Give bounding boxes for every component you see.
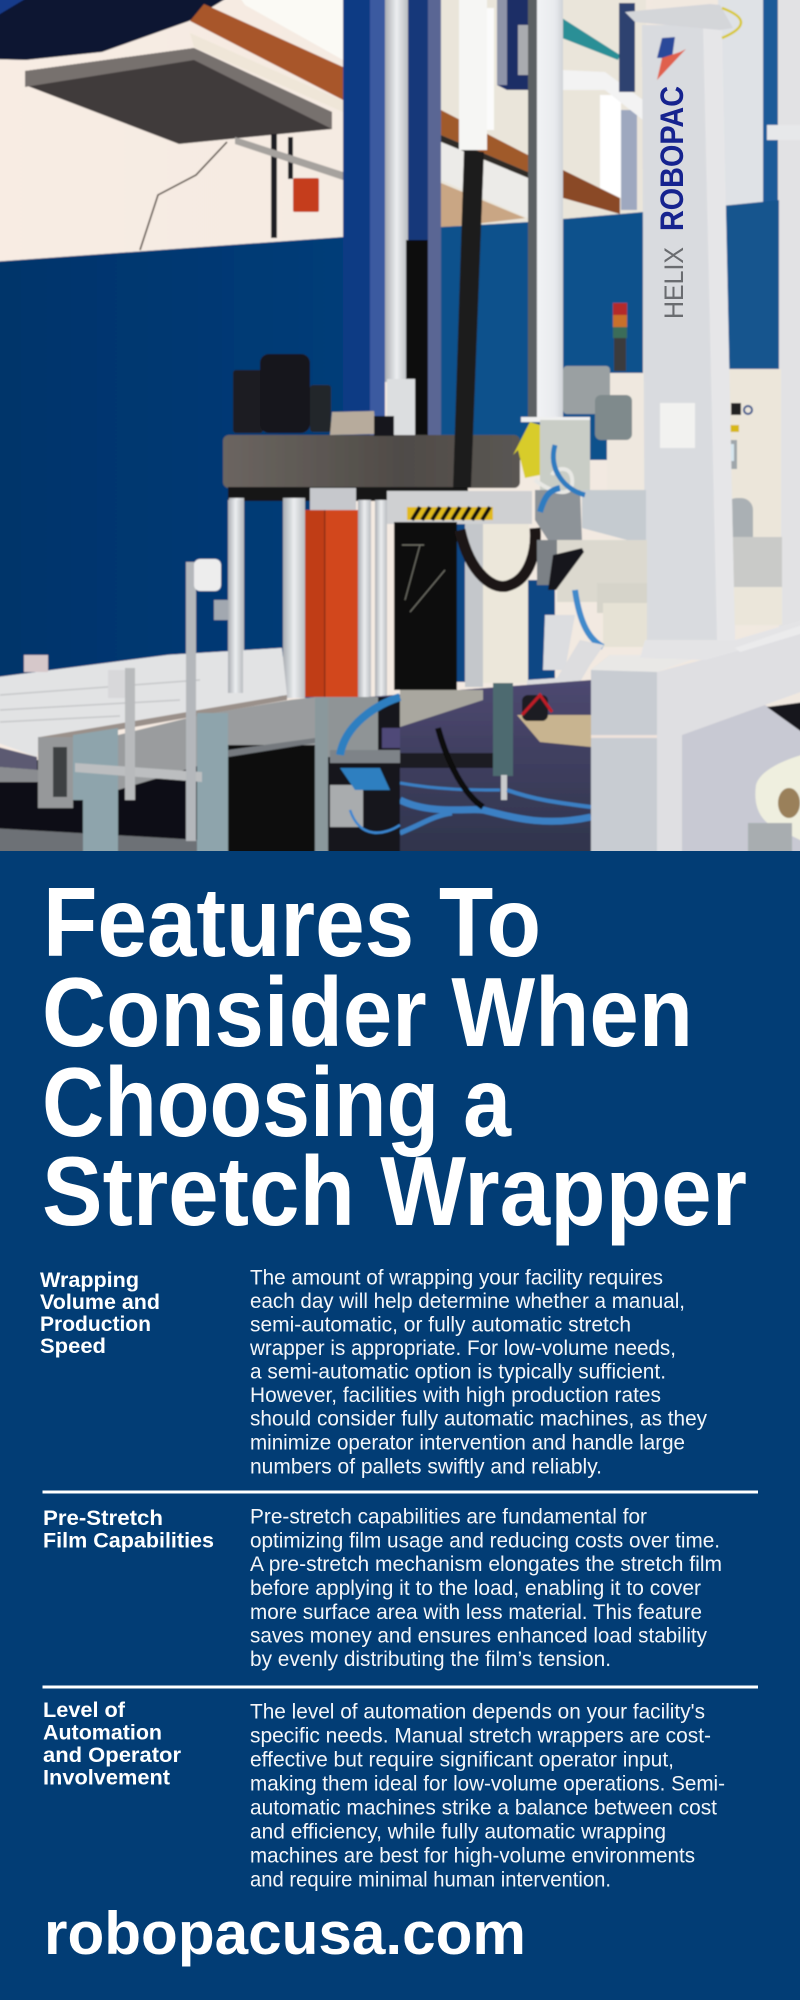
hoses on floor — [400, 728, 591, 833]
support arm — [527, 640, 604, 687]
carriage underside — [228, 487, 468, 501]
signal tower — [613, 303, 627, 371]
silver pipe — [528, 0, 563, 420]
logo text: HELIX: HELIX — [659, 247, 689, 319]
logo text: ROBOPAC: ROBOPAC — [654, 86, 690, 231]
gray motor unit — [521, 366, 632, 492]
title: Choosing a — [42, 1047, 512, 1157]
orange film rollers — [305, 510, 358, 697]
text block: wrapping volume: each day will help determine whether a manual, — [250, 1289, 685, 1313]
text block: level of automation: The level of automation depends on your facility's — [250, 1700, 705, 1724]
debris under machine — [517, 695, 591, 747]
gray ring floor — [400, 690, 483, 727]
black motor — [233, 354, 394, 436]
heading: level of automation and operator involvement: Automation — [43, 1720, 162, 1744]
main pillar with logo — [625, 4, 741, 640]
conveyor legs — [73, 697, 328, 870]
text block: level of automation: effective but require significant operator input, — [250, 1748, 674, 1772]
sensor stand — [108, 500, 243, 841]
website url: robopacusa.com — [44, 1900, 526, 1967]
gray gearbox — [535, 490, 646, 585]
text block: level of automation — [250, 1700, 725, 1892]
conveyor and lower frame dark — [0, 646, 316, 851]
heading: pre-stretch film capabilities: Film Capabilities — [43, 1528, 214, 1552]
title: Stretch Wrapper — [42, 1136, 747, 1246]
heading: level of automation and operator involvement: Level of — [43, 1698, 126, 1722]
heading: wrapping volume and production speed: Speed — [40, 1334, 106, 1358]
cream machinery block — [557, 540, 647, 647]
hazard beam — [387, 491, 532, 524]
heading: wrapping volume and production speed: Production — [40, 1312, 151, 1336]
text block: wrapping volume: should consider fully automatic machines, as they — [250, 1406, 707, 1430]
text block: wrapping volume: semi-automatic, or fully automatic stretch — [250, 1312, 631, 1336]
cream cylinder and blue gap — [457, 522, 555, 687]
rotating ring — [223, 435, 520, 488]
text block: level of automation: automatic machines strike a balance between cost — [250, 1796, 717, 1820]
text block: level of automation: machines are best for high-volume environments — [250, 1844, 695, 1868]
text block: wrapping volume: minimize operator intervention and handle large — [250, 1430, 685, 1454]
heading: level of automation and operator involvement: and Operator — [43, 1743, 182, 1767]
photo: Robopac Helix stretch wrapper in a factory — [0, 0, 800, 880]
heading: wrapping volume and production speed: Volume and — [40, 1290, 160, 1314]
black panel — [394, 522, 457, 690]
yellow and blue cables — [513, 422, 603, 670]
floor — [370, 679, 592, 851]
column: navy uprights — [343, 0, 441, 440]
heading: wrapping volume and production speed: Wrapping — [40, 1268, 139, 1292]
text block: pre-stretch: optimizing film usage and reducing costs over time. — [250, 1528, 720, 1552]
machine base — [590, 627, 800, 851]
text block: wrapping volume: The amount of wrapping your facility requires — [250, 1266, 663, 1290]
floor bar and post — [400, 683, 513, 800]
text block: level of automation: and efficiency, while fully automatic wrapping — [250, 1820, 666, 1844]
silver legs — [229, 488, 387, 698]
text block: pre-stretch: more surface area with less material. This feature — [250, 1600, 702, 1624]
text block: wrapping volume: wrapper is appropriate. For low-volume needs, — [249, 1336, 676, 1360]
text block: level of automation: specific needs. Manual stretch wrappers are cost- — [250, 1724, 711, 1748]
text block: pre-stretch: Pre-stretch capabilities are fundamental for — [250, 1504, 647, 1528]
text block: wrapping volume — [249, 1266, 707, 1478]
text block: pre-stretch: A pre-stretch mechanism elongates the stretch film — [250, 1552, 722, 1576]
text block: level of automation: making them ideal for low-volume operations. Semi- — [250, 1772, 725, 1796]
text block: wrapping volume: a semi-automatic option is typically sufficient. — [250, 1360, 666, 1384]
right pillar — [779, 0, 800, 640]
drag chain — [460, 528, 535, 587]
text block: pre-stretch: by evenly distributing the film’s tension. — [250, 1647, 611, 1671]
text block: pre-stretch: saves money and ensures enhanced load stability — [250, 1624, 707, 1648]
title — [42, 867, 747, 1246]
right wall section — [718, 0, 778, 210]
title: Consider When — [42, 957, 693, 1067]
blue wall right — [441, 200, 780, 460]
heading: level of automation and operator involvement: Involvement — [43, 1766, 170, 1790]
cream cabinet — [607, 369, 782, 625]
text block: wrapping volume: However, facilities with high production rates — [250, 1383, 661, 1407]
title: Features To — [43, 867, 541, 977]
text block: wrapping volume: numbers of pallets swiftly and reliably. — [250, 1454, 602, 1478]
text block: pre-stretch — [250, 1504, 722, 1671]
heading: pre-stretch film capabilities — [43, 1506, 214, 1552]
blue wall left — [0, 237, 343, 700]
cable chain — [453, 150, 484, 488]
film roll — [748, 755, 800, 851]
text block: level of automation: and require minimal human intervention. — [250, 1868, 611, 1892]
heading: wrapping volume and production speed — [40, 1268, 160, 1358]
heading: level of automation and operator involvement — [43, 1698, 182, 1790]
upper right background — [441, 0, 646, 235]
heading: pre-stretch film capabilities: Pre-Stretch — [43, 1506, 163, 1530]
lower centre equipment — [328, 697, 400, 870]
text block: pre-stretch: before applying it to the load, enabling it to cover — [250, 1576, 701, 1600]
